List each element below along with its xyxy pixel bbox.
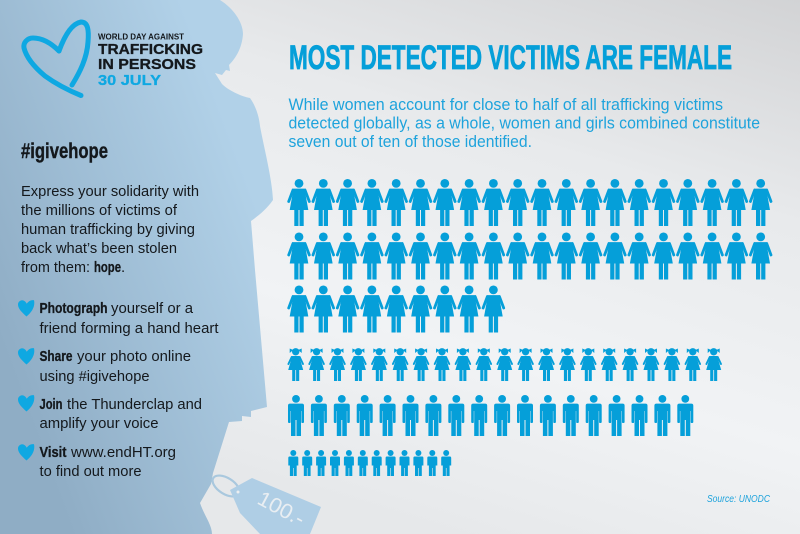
logo text bbox=[98, 32, 203, 89]
description text bbox=[288, 96, 760, 151]
item: visit: to find out more bbox=[40, 463, 142, 480]
description text: While women account for close to half of all trafficking victims bbox=[288, 96, 723, 114]
item: photograph: yourself or a bbox=[111, 300, 194, 317]
price label: 100.- bbox=[254, 487, 309, 531]
intro paragraph: human trafficking by giving bbox=[21, 221, 195, 238]
description text: seven out of ten of those identified. bbox=[288, 133, 532, 151]
item: photograph bbox=[18, 300, 219, 337]
intro paragraph: back what’s been stolen bbox=[21, 240, 177, 257]
item: share bbox=[18, 348, 191, 385]
intro paragraph: from them: bbox=[21, 259, 90, 276]
item: visit bbox=[18, 444, 176, 480]
item: visit: www.endHT.org bbox=[70, 444, 176, 461]
silhouette of trafficked girl bbox=[0, 0, 273, 534]
item: share: Share bbox=[40, 348, 72, 365]
intro paragraph: Express your solidarity with bbox=[21, 183, 199, 200]
pictogram: women row 3 bbox=[289, 286, 504, 332]
logo: heart bbox=[24, 22, 88, 96]
icon: price tag with ring bbox=[209, 471, 321, 534]
item: share: your photo online bbox=[77, 348, 191, 365]
item: visit: Visit bbox=[40, 444, 67, 461]
logo text: 30 JULY bbox=[98, 72, 161, 89]
pictogram: boys row bbox=[288, 450, 451, 476]
action list bbox=[18, 300, 219, 480]
pictogram: girls row bbox=[288, 348, 721, 381]
item: join: Join bbox=[40, 396, 62, 413]
intro paragraph bbox=[21, 183, 199, 276]
pictogram: women row 2 bbox=[289, 232, 771, 280]
item: join: the Thunderclap and bbox=[67, 396, 202, 413]
item: join bbox=[18, 395, 202, 432]
logo text: WORLD DAY AGAINST bbox=[98, 32, 185, 42]
item: share: using #igivehope bbox=[40, 368, 150, 385]
hashtag heading: #igivehope bbox=[21, 140, 108, 163]
intro paragraph: . bbox=[121, 259, 125, 276]
pictogram: women row 1 bbox=[289, 179, 771, 226]
intro paragraph: hope bbox=[94, 259, 121, 276]
item: photograph: Photograph bbox=[40, 300, 108, 317]
source note: Source: UNODC bbox=[707, 493, 770, 505]
item: photograph: friend forming a hand heart bbox=[40, 320, 219, 337]
logo text: IN PERSONS bbox=[98, 56, 196, 73]
item: join: amplify your voice bbox=[40, 415, 158, 432]
pictogram: men row bbox=[288, 395, 693, 436]
logo text: TRAFFICKING bbox=[98, 41, 203, 58]
description text: detected globally, as a whole, women and girls combined constitute bbox=[288, 114, 760, 132]
intro paragraph: the millions of victims of bbox=[21, 202, 178, 219]
